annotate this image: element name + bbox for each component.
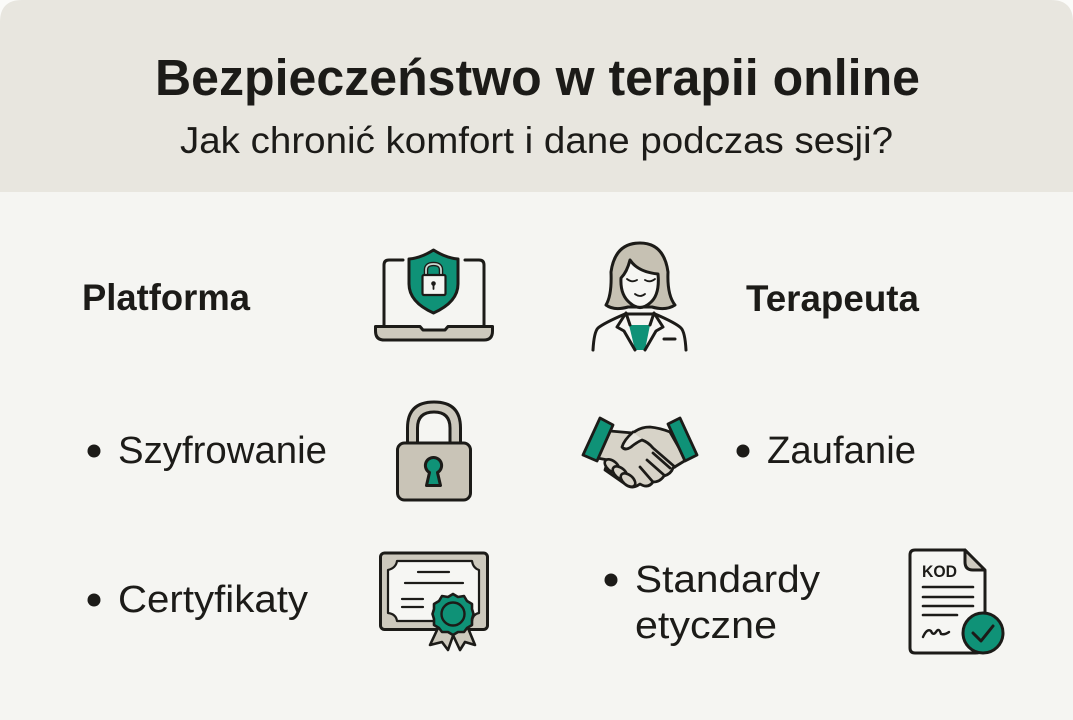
list item: Zaufanie: Zaufanie xyxy=(767,430,916,472)
heading: Platforma: Platforma xyxy=(82,277,250,318)
title: Bezpieczeństwo w terapii online xyxy=(155,49,920,106)
list item: Standardy etyczne xyxy=(604,559,820,647)
icon: code of ethics document xyxy=(910,550,1003,653)
list item: Szyfrowanie: Szyfrowanie xyxy=(118,430,327,472)
icon: certificate xyxy=(380,553,488,650)
heading: Terapeuta: Terapeuta xyxy=(746,278,919,319)
list item: Standardy etyczne: Standardy xyxy=(635,559,820,601)
icon: laptop with shield xyxy=(376,250,492,340)
list item: Certyfikaty: Certyfikaty xyxy=(118,579,308,621)
icon: padlock xyxy=(398,402,470,500)
icon: handshake xyxy=(583,418,697,489)
icon: code of ethics document: KOD xyxy=(922,562,957,581)
list item: Standardy etyczne: etyczne xyxy=(635,605,777,647)
icon: therapist xyxy=(593,243,686,350)
subtitle: Jak chronić komfort i dane podczas sesji? xyxy=(180,120,893,161)
